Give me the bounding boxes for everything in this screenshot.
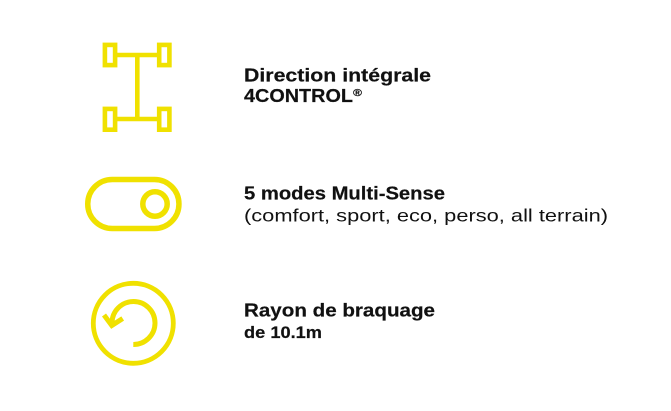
icon: chassis with four wheels: [105, 45, 169, 130]
text: turning radius label: Rayon de braquage: [244, 300, 435, 320]
text: all-wheel drive label: Direction intégrale: [244, 66, 431, 86]
text: turning radius label: [244, 300, 435, 342]
text: all-wheel drive label: ®: [353, 87, 362, 99]
text: all-wheel drive label: 4CONTROL: [244, 86, 353, 106]
panel: turning radius row: [93, 283, 435, 363]
icon: circular return arrow: [93, 283, 173, 363]
text: all-wheel drive label: [244, 66, 431, 106]
panel: multi-sense modes row: [88, 179, 608, 228]
text: multi-sense modes label: 5 modes Multi-Sense: [244, 184, 445, 204]
text: turning radius label: de 10.1m: [244, 323, 322, 342]
text: multi-sense modes label: [244, 184, 608, 226]
icon: toggle switch: [88, 179, 179, 228]
panel: all-wheel drive row: [105, 45, 431, 130]
text: multi-sense modes label: (comfort, sport, eco, perso, all terrain): [244, 206, 608, 226]
